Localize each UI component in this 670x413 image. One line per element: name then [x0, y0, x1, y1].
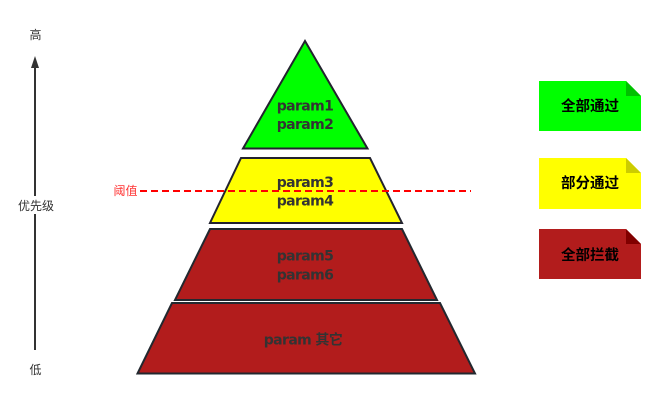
tier: red upper: param5: [277, 248, 333, 264]
legend: partial pass: 部分通过: [561, 174, 619, 192]
tier: red lower: [138, 303, 475, 374]
tier: green: param1: [277, 98, 333, 114]
tier: yellow: [210, 158, 402, 223]
legend: all blocked: 全部拦截: [561, 246, 619, 264]
tier: yellow: param3: [277, 175, 333, 191]
label: high: 高: [29, 27, 42, 42]
tier: green: param2: [277, 117, 333, 133]
legend: all pass: 全部通过: [561, 97, 619, 115]
tier: green: [243, 41, 368, 148]
label: threshold: 阈值: [113, 183, 138, 198]
label: priority: 优先级: [18, 199, 54, 213]
tier: red upper: [175, 229, 437, 300]
legend: all blocked: [539, 229, 641, 279]
legend: all pass: [539, 81, 641, 131]
tier: red lower: param 其它: [264, 332, 342, 348]
pyramid: [138, 41, 475, 374]
dashed line: [140, 190, 471, 192]
label: low: 低: [29, 363, 42, 377]
tier: yellow: param4: [277, 194, 334, 210]
tier: red upper: param6: [277, 268, 333, 284]
priority axis: [16, 27, 56, 377]
legend: partial pass: [539, 158, 641, 209]
arrow: up: [31, 56, 39, 350]
legend: [539, 81, 641, 279]
